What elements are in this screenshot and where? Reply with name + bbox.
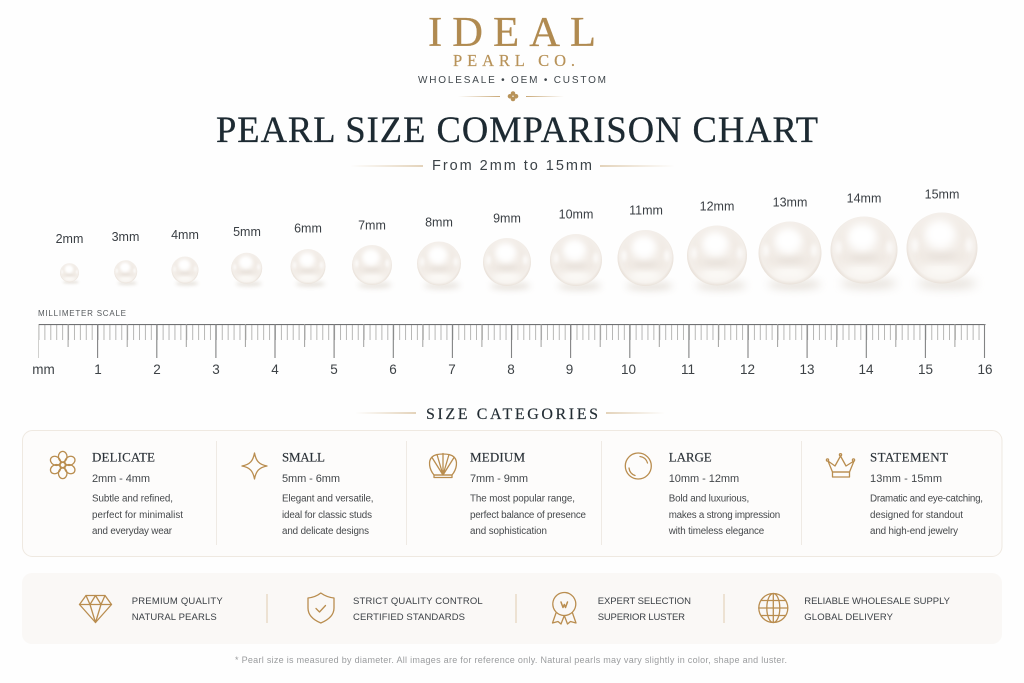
ruler numbers: 4 [271, 362, 279, 377]
ruler numbers: 7 [448, 362, 456, 377]
ruler numbers: 5 [330, 362, 338, 377]
logo [418, 9, 606, 101]
text: statement: STATEMENT [870, 450, 948, 464]
text: medium: MEDIUM [470, 450, 525, 464]
title: PEARL SIZE COMPARISON CHART [216, 109, 818, 150]
text: statement: and high-end jewelry [870, 526, 958, 537]
ruler numbers: 14 [858, 362, 874, 377]
pearl 4mm: 4mm [171, 228, 199, 242]
text: large: Bold and luxurious, [669, 494, 749, 504]
icon: shield check [308, 593, 334, 623]
text: delicate: and everyday wear [92, 526, 173, 537]
text: large: makes a strong impression [669, 510, 780, 521]
text: small: Elegant and versatile, [282, 494, 374, 504]
pearl 11mm [618, 204, 674, 290]
pearl 9mm: 9mm [493, 212, 521, 226]
ruler numbers: 3 [212, 362, 220, 377]
text: wholesale supply [804, 596, 951, 623]
text: statement: designed for standout [870, 510, 963, 521]
pearl 6mm [290, 222, 326, 286]
ruler numbers: 1 [94, 362, 102, 377]
pearl 14mm [830, 192, 898, 288]
text: quality control [353, 596, 483, 623]
text: premium quality [132, 596, 223, 623]
text: delicate: Subtle and refined, [92, 494, 173, 504]
text: wholesale supply: RELIABLE WHOLESALE SUPPLY [804, 596, 951, 607]
ruler numbers: 15 [918, 362, 933, 377]
text: large: 10mm - 12mm [669, 473, 739, 485]
pearl 2mm [56, 232, 83, 284]
category: large [625, 450, 780, 537]
millimeter ruler [32, 309, 993, 377]
pearl 5mm [231, 225, 262, 286]
logo tagline: WHOLESALE • OEM • CUSTOM [418, 75, 606, 86]
pearl 3mm [112, 230, 139, 285]
ruler numbers: mm [32, 362, 55, 377]
pearl 8mm: 8mm [425, 216, 453, 230]
text: medium: The most popular range, [470, 494, 575, 504]
pearl 2mm: 2mm [56, 232, 83, 246]
text: delicate: 2mm - 4mm [92, 473, 150, 485]
ruler numbers: 9 [566, 362, 573, 377]
subtitle: From 2mm to 15mm [432, 158, 592, 174]
icon: award ribbon [552, 592, 576, 624]
feature: wholesale supply [759, 594, 951, 623]
text: quality control: STRICT QUALITY CONTROL [353, 596, 483, 607]
ruler numbers: 2 [153, 362, 161, 377]
text: statement: Dramatic and eye-catching, [870, 494, 983, 504]
text: expert selection [598, 596, 691, 623]
category: statement [826, 450, 983, 537]
size categories heading: SIZE CATEGORIES [426, 406, 598, 423]
panel: size categories [22, 430, 1002, 556]
ruler caption: MILLIMETER SCALE [38, 309, 126, 318]
text: medium: perfect balance of presence [470, 510, 587, 521]
text: delicate [92, 450, 183, 537]
ruler numbers: 6 [389, 362, 397, 377]
pearl size row [56, 188, 978, 290]
text: small: SMALL [282, 450, 325, 464]
text: medium: and sophistication [470, 526, 547, 537]
feature: expert selection [552, 592, 691, 624]
logo sub-wordmark: PEARL CO.: PEARL CO. [453, 51, 575, 70]
icon: crown [826, 454, 855, 477]
text: delicate: DELICATE [92, 450, 155, 464]
text: statement [870, 450, 983, 537]
ruler ticks [38, 324, 986, 358]
text: small: and delicate designs [282, 526, 369, 537]
icon: globe [759, 594, 788, 622]
text: small [282, 450, 374, 537]
category: small [242, 450, 374, 537]
pearl 12mm: 12mm [700, 200, 734, 214]
text: wholesale supply: GLOBAL DELIVERY [804, 612, 894, 623]
pearl 5mm: 5mm [233, 225, 261, 239]
pearl 15mm: 15mm [925, 188, 959, 202]
ruler numbers: 8 [507, 362, 515, 377]
category: medium [430, 450, 587, 537]
text: small: 5mm - 6mm [282, 473, 340, 485]
text: medium [470, 450, 587, 537]
text: large: with timeless elegance [668, 526, 765, 537]
text: large: LARGE [669, 450, 712, 464]
text: expert selection: SUPERIOR LUSTER [598, 612, 685, 623]
pearl 9mm [483, 212, 531, 289]
pearl 8mm [417, 216, 461, 289]
text: large [668, 450, 780, 537]
pearl 11mm: 11mm [629, 204, 663, 218]
pearl 3mm: 3mm [112, 230, 139, 244]
icon: four point star [242, 453, 267, 479]
footnote: * Pearl size is measured by diameter. All images are for reference only. Natural pearls may vary slightly in color, shape and luster. [235, 655, 787, 665]
text: premium quality: PREMIUM QUALITY [132, 596, 223, 607]
ruler numbers: 10 [621, 362, 636, 377]
pearl 4mm [171, 228, 199, 285]
text: expert selection: EXPERT SELECTION [598, 596, 691, 607]
pearl 15mm [906, 188, 978, 288]
text: small: ideal for classic studs [282, 510, 372, 521]
ruler numbers: 12 [740, 362, 755, 377]
icon: diamond [80, 596, 112, 622]
pearl 12mm [687, 200, 747, 290]
text: premium quality: NATURAL PEARLS [132, 612, 217, 623]
pearl 10mm: 10mm [559, 208, 593, 222]
ruler numbers: 13 [799, 362, 815, 377]
text: statement: 13mm - 15mm [870, 473, 942, 485]
logo wordmark: IDEAL: IDEAL [428, 9, 596, 56]
feature: premium quality [80, 596, 223, 623]
pearl 14mm: 14mm [847, 192, 881, 206]
ruler numbers [32, 362, 993, 377]
pearl 7mm [352, 218, 392, 288]
panel: quality features [22, 573, 1002, 644]
category: delicate [49, 450, 183, 537]
logo ornament [458, 91, 564, 101]
icon: pearl circle [625, 453, 651, 479]
ruler numbers: 11 [681, 362, 695, 377]
ruler numbers: 16 [977, 362, 993, 377]
text: delicate: perfect for minimalist [92, 510, 183, 521]
text: medium: 7mm - 9mm [470, 473, 528, 485]
icon: shell [430, 454, 456, 478]
pearl 13mm: 13mm [773, 196, 807, 210]
pearl 7mm: 7mm [358, 218, 386, 232]
pearl 6mm: 6mm [294, 222, 322, 236]
icon: flower [49, 451, 77, 479]
pearl 13mm [758, 196, 822, 289]
text: quality control: CERTIFIED STANDARDS [353, 612, 465, 623]
feature: quality control [308, 593, 483, 623]
pearl 10mm [550, 208, 602, 290]
